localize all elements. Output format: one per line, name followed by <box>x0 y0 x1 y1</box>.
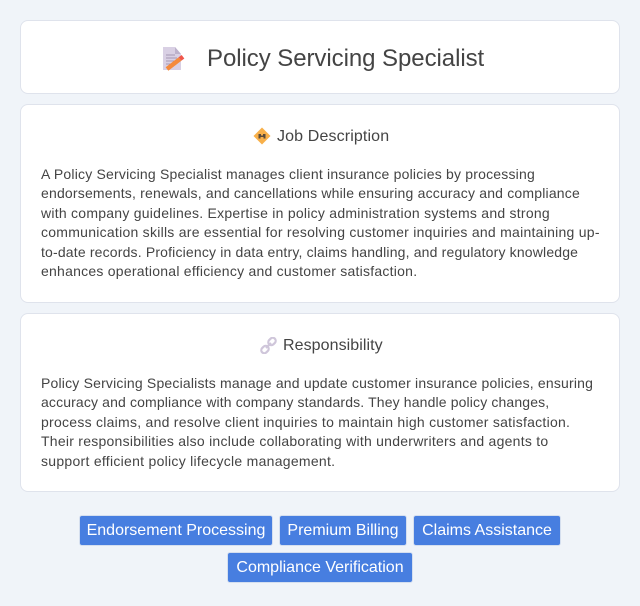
tag: endorsement processing <box>79 515 273 546</box>
tag: claims assistance <box>413 515 561 546</box>
text block: job description: endorsements, renewals, and cancellations while ensuring accuracy and compliance <box>41 185 580 201</box>
tag: endorsement processing: Endorsement Processing <box>87 522 265 539</box>
text block: job description <box>41 166 600 279</box>
text block: job description: enhances operational efficiency and customer satisfaction. <box>41 263 417 279</box>
text block: job description: communication skills are essential for resolving customer inquiries and maintaining up- <box>41 224 600 240</box>
text block: job description: to-date records. Proficiency in data entry, claims handling, and regulatory knowledge <box>41 244 578 260</box>
tag: compliance verification <box>227 552 413 583</box>
tag: premium billing: Premium Billing <box>287 522 399 539</box>
heading: responsibility: Responsibility <box>283 337 383 354</box>
tag: compliance verification: Compliance Verification <box>236 559 404 576</box>
text block: responsibility: accuracy and compliance with company standards. They handle policy changes, <box>41 394 549 410</box>
text block: responsibility <box>41 374 593 469</box>
heading: job description: Job Description <box>277 128 389 145</box>
tag: claims assistance: Claims Assistance <box>422 522 552 539</box>
icon: orange diamond <box>254 128 270 144</box>
title: Policy Servicing Specialist <box>207 45 484 72</box>
text block: responsibility: Their responsibilities also include collaborating with underwriters and agents to <box>41 433 548 449</box>
text block: responsibility: Policy Servicing Specialists manage and update customer insurance policies, ensuring <box>41 374 593 390</box>
tag: premium billing <box>279 515 407 546</box>
text block: responsibility: process claims, and resolve client inquiries to maintain high customer satisfaction. <box>41 414 570 430</box>
icon: document with pencil <box>163 47 184 71</box>
text block: responsibility: support efficient policy lifecycle management. <box>41 452 335 468</box>
text block: job description: A Policy Servicing Specialist manages client insurance policies by processing <box>41 166 535 182</box>
text block: job description: with company guidelines. Expertise in policy administration systems and strong <box>41 204 550 220</box>
icon: chain link <box>260 337 277 354</box>
panel: job description <box>20 104 620 303</box>
panel: title card <box>20 20 620 94</box>
panel: responsibility <box>20 313 620 492</box>
